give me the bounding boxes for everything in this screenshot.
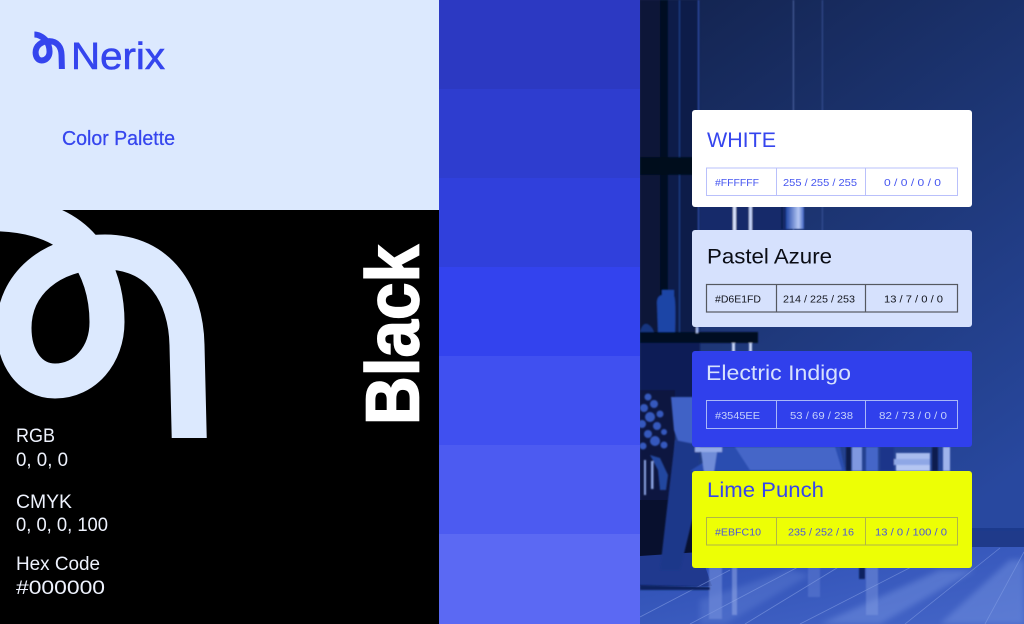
panel: logo header (0, 0, 439, 210)
panel: indigo tint stripes (439, 0, 640, 624)
label: Black: Black (350, 245, 434, 425)
colour value table: White: 255 / 255 / 255 (783, 177, 857, 189)
colour values: Hex Code: Hex Code (16, 554, 100, 575)
card: White (692, 110, 972, 207)
large logo mark (0, 214, 190, 470)
card: Electric Indigo (692, 351, 972, 447)
logo: Nerix mark and wordmark: Nerix (71, 36, 165, 78)
logo: Nerix mark and wordmark (34, 34, 165, 78)
card title: Lime Punch: Lime Punch (707, 478, 824, 502)
colour values: Hex Code: #000000 (16, 578, 105, 599)
colour values: RGB: RGB (16, 426, 55, 447)
colour values: RGB: 0, 0, 0 (16, 450, 68, 471)
colour value table: Pastel Azure: 13 / 7 / 0 / 0 (884, 294, 943, 306)
colour value table: Electric Indigo: #3545EE (715, 410, 760, 422)
colour value table: Electric Indigo (706, 400, 958, 428)
wall base and floor (640, 500, 1024, 624)
card title: Electric Indigo: Electric Indigo (706, 361, 851, 385)
colour value table: Pastel Azure: #D6E1FD (715, 294, 761, 306)
heading: Color Palette: Color Palette (62, 128, 175, 150)
colour values: CMYK: 0, 0, 0, 100 (16, 515, 108, 536)
colour values: RGB (16, 426, 68, 471)
colour value table: White: 0 / 0 / 0 / 0 (884, 177, 941, 189)
card: Pastel Azure (692, 230, 972, 327)
colour value table: Lime Punch: 235 / 252 / 16 (788, 526, 854, 538)
colour value table: Pastel Azure (706, 284, 958, 312)
colour values: CMYK (16, 492, 108, 536)
colour value table: White (706, 168, 958, 196)
card title: WHITE: WHITE (707, 128, 776, 152)
card: Lime Punch (692, 471, 972, 568)
panel: black colour swatch (0, 210, 420, 594)
colour value table: Pastel Azure: 214 / 225 / 253 (783, 294, 855, 306)
colour value table: Lime Punch (706, 518, 958, 545)
colour value table: Lime Punch: 13 / 0 / 100 / 0 (875, 526, 947, 538)
chair and furniture (640, 397, 950, 619)
colour values: CMYK: CMYK (16, 492, 72, 513)
card title: Pastel Azure: Pastel Azure (707, 244, 832, 268)
colour value table: White: #FFFFFF (715, 177, 759, 189)
colour value table: Lime Punch: #EBFC10 (715, 526, 761, 538)
colour values: Hex Code (16, 554, 105, 599)
colour value table: Electric Indigo: 82 / 73 / 0 / 0 (879, 410, 947, 422)
photo: blue-tinted interior (638, 0, 1024, 624)
colour value table: Electric Indigo: 53 / 69 / 238 (790, 410, 853, 422)
plant (638, 394, 668, 495)
